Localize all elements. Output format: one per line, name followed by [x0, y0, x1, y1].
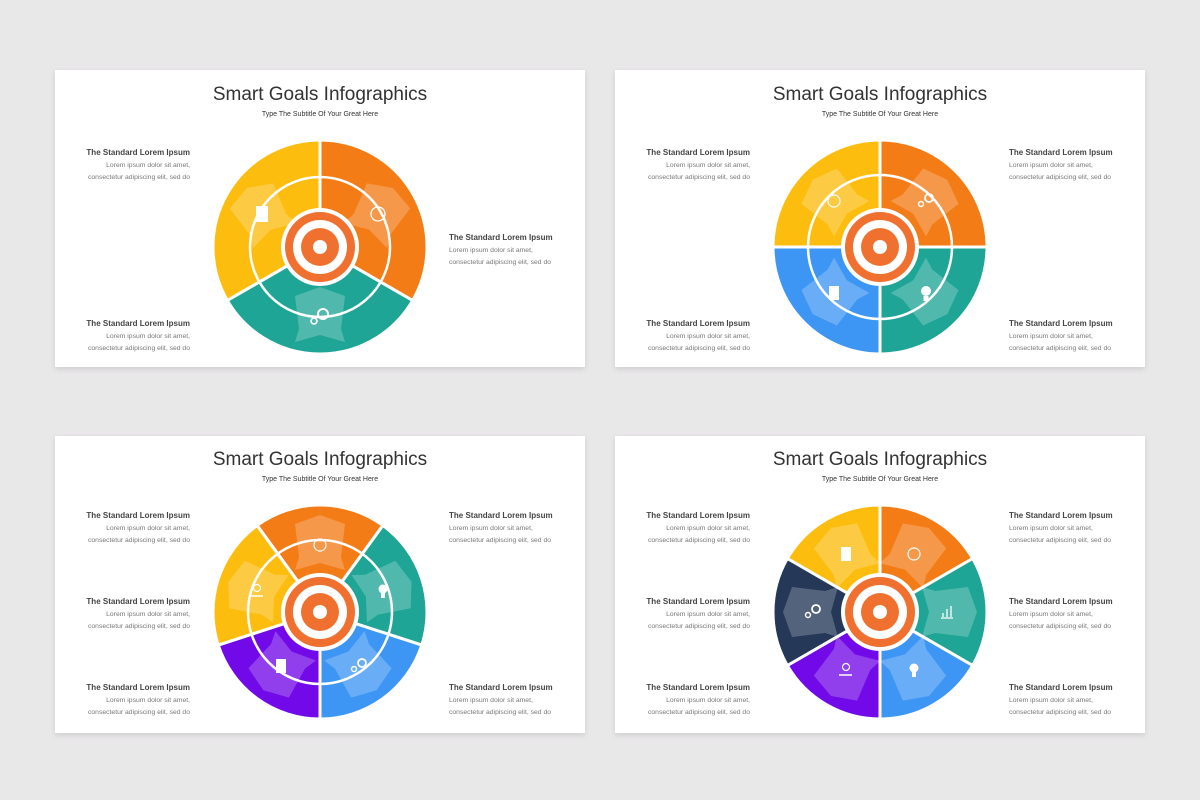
- text block: left 3: The Standard Lorem Ipsum: [646, 683, 750, 692]
- text block: left 2: consectetur adipiscing elit, sed do: [88, 623, 190, 630]
- text block: right bottom: consectetur adipiscing elit, sed do: [1009, 345, 1111, 352]
- text block: right: The Standard Lorem Ipsum: [449, 233, 553, 242]
- text block: left bottom: Lorem ipsum dolor sit amet,: [106, 333, 190, 340]
- text block: right: consectetur adipiscing elit, sed do: [449, 259, 551, 266]
- subtitle: Type The Subtitle Of Your Great Here: [262, 476, 378, 483]
- icon: gears: [891, 162, 965, 236]
- text block: left bottom: The Standard Lorem Ipsum: [646, 319, 750, 328]
- text block: right 1: The Standard Lorem Ipsum: [449, 511, 553, 520]
- text block: right bottom: [1009, 319, 1113, 352]
- text block: right 2: [449, 683, 553, 716]
- panel: bottom-right 6 segment: [615, 436, 1145, 746]
- icon: document: [795, 258, 869, 332]
- icon: chart: [922, 587, 977, 637]
- panel: top-right 4 segment: [615, 70, 1145, 367]
- text block: right: [449, 233, 553, 266]
- title: Smart Goals Infographics: [773, 84, 987, 105]
- text block: left top: consectetur adipiscing elit, sed do: [648, 174, 750, 181]
- text block: left 2: [86, 597, 190, 630]
- text block: right 2: consectetur adipiscing elit, sed do: [449, 709, 551, 716]
- text block: left 2: The Standard Lorem Ipsum: [646, 597, 750, 606]
- text block: left top: The Standard Lorem Ipsum: [86, 148, 190, 157]
- text block: left 3: consectetur adipiscing elit, sed do: [648, 709, 750, 716]
- text block: left top: [86, 148, 190, 181]
- icon: document: [243, 631, 316, 705]
- text block: right top: The Standard Lorem Ipsum: [1009, 148, 1113, 157]
- text block: right 2: [1009, 597, 1113, 630]
- text block: right top: consectetur adipiscing elit, sed do: [1009, 174, 1111, 181]
- text block: left bottom: [86, 319, 190, 352]
- text block: left 1: consectetur adipiscing elit, sed do: [88, 537, 190, 544]
- icon: document: [225, 176, 296, 248]
- text block: right 3: The Standard Lorem Ipsum: [1009, 683, 1113, 692]
- text block: left 3: Lorem ipsum dolor sit amet,: [106, 697, 190, 704]
- text block: right 3: [1009, 683, 1113, 716]
- text block: left 1: [86, 511, 190, 544]
- text block: left bottom: Lorem ipsum dolor sit amet,: [666, 333, 750, 340]
- text block: left top: The Standard Lorem Ipsum: [646, 148, 750, 157]
- text block: left 1: [646, 511, 750, 544]
- text block: left 3: [646, 683, 750, 716]
- icon: gears: [783, 587, 838, 637]
- icon: gears: [324, 631, 397, 705]
- subtitle: Type The Subtitle Of Your Great Here: [822, 476, 938, 483]
- icon: hand money: [221, 558, 289, 623]
- text block: left top: [646, 148, 750, 181]
- text block: right 1: Lorem ipsum dolor sit amet,: [1009, 525, 1093, 532]
- text block: left 2: Lorem ipsum dolor sit amet,: [106, 611, 190, 618]
- text block: left 1: The Standard Lorem Ipsum: [86, 511, 190, 520]
- target: [841, 573, 919, 651]
- icon: hand money: [809, 636, 880, 708]
- text block: left bottom: The Standard Lorem Ipsum: [86, 319, 190, 328]
- icon: document: [809, 516, 880, 588]
- text block: right 3: Lorem ipsum dolor sit amet,: [1009, 697, 1093, 704]
- text block: left bottom: consectetur adipiscing elit, sed do: [88, 345, 190, 352]
- icon: clock: [344, 176, 415, 248]
- text block: left 2: consectetur adipiscing elit, sed do: [648, 623, 750, 630]
- text block: right 1: [449, 511, 553, 544]
- text block: left 2: Lorem ipsum dolor sit amet,: [666, 611, 750, 618]
- target: [281, 573, 359, 651]
- panel: top-left 3 segment: [55, 70, 585, 393]
- text block: right bottom: The Standard Lorem Ipsum: [1009, 319, 1113, 328]
- panel: bottom-left 5 segment: [55, 436, 585, 742]
- subtitle: Type The Subtitle Of Your Great Here: [262, 111, 378, 118]
- target: [841, 208, 919, 286]
- text block: left bottom: consectetur adipiscing elit, sed do: [648, 345, 750, 352]
- text block: right: Lorem ipsum dolor sit amet,: [449, 247, 533, 254]
- title: Smart Goals Infographics: [213, 84, 427, 105]
- text block: left 1: Lorem ipsum dolor sit amet,: [106, 525, 190, 532]
- text block: left 3: Lorem ipsum dolor sit amet,: [666, 697, 750, 704]
- text block: left top: Lorem ipsum dolor sit amet,: [666, 162, 750, 169]
- subtitle: Type The Subtitle Of Your Great Here: [822, 111, 938, 118]
- title: Smart Goals Infographics: [213, 449, 427, 470]
- text block: right top: Lorem ipsum dolor sit amet,: [1009, 162, 1093, 169]
- text block: right bottom: Lorem ipsum dolor sit amet,: [1009, 333, 1093, 340]
- target: [281, 208, 359, 286]
- text block: left 1: consectetur adipiscing elit, sed do: [648, 537, 750, 544]
- text block: left 3: [86, 683, 190, 716]
- text block: right 3: consectetur adipiscing elit, sed do: [1009, 709, 1111, 716]
- wheel: 4 segments: [773, 140, 987, 354]
- wheel: 5 segments: [187, 466, 465, 742]
- text block: right 1: The Standard Lorem Ipsum: [1009, 511, 1113, 520]
- text block: left top: consectetur adipiscing elit, sed do: [88, 174, 190, 181]
- title: Smart Goals Infographics: [773, 449, 987, 470]
- text block: left 1: The Standard Lorem Ipsum: [646, 511, 750, 520]
- text block: left 3: consectetur adipiscing elit, sed do: [88, 709, 190, 716]
- text block: left 2: The Standard Lorem Ipsum: [86, 597, 190, 606]
- text block: left 3: The Standard Lorem Ipsum: [86, 683, 190, 692]
- text block: right 1: [1009, 511, 1113, 544]
- text block: right 1: Lorem ipsum dolor sit amet,: [449, 525, 533, 532]
- text block: right 2: The Standard Lorem Ipsum: [449, 683, 553, 692]
- text block: right 2: consectetur adipiscing elit, sed do: [1009, 623, 1111, 630]
- text block: left 2: [646, 597, 750, 630]
- text block: left bottom: [646, 319, 750, 352]
- icon: bulb: [880, 636, 951, 708]
- icon: gears: [295, 287, 345, 342]
- wheel: 6 segments: [741, 478, 1019, 746]
- icon: bulb: [891, 258, 965, 332]
- text block: left top: Lorem ipsum dolor sit amet,: [106, 162, 190, 169]
- text block: left 1: Lorem ipsum dolor sit amet,: [666, 525, 750, 532]
- icon: clock: [295, 515, 345, 570]
- icon: clock: [880, 516, 951, 588]
- text block: right 2: The Standard Lorem Ipsum: [1009, 597, 1113, 606]
- text block: right top: [1009, 148, 1113, 181]
- text block: right 2: Lorem ipsum dolor sit amet,: [449, 697, 533, 704]
- icon: clock: [795, 162, 869, 236]
- wheel: 3 segments: [174, 128, 427, 393]
- text block: right 2: Lorem ipsum dolor sit amet,: [1009, 611, 1093, 618]
- text block: right 1: consectetur adipiscing elit, sed do: [1009, 537, 1111, 544]
- icon: bulb: [351, 558, 419, 623]
- text block: right 1: consectetur adipiscing elit, sed do: [449, 537, 551, 544]
